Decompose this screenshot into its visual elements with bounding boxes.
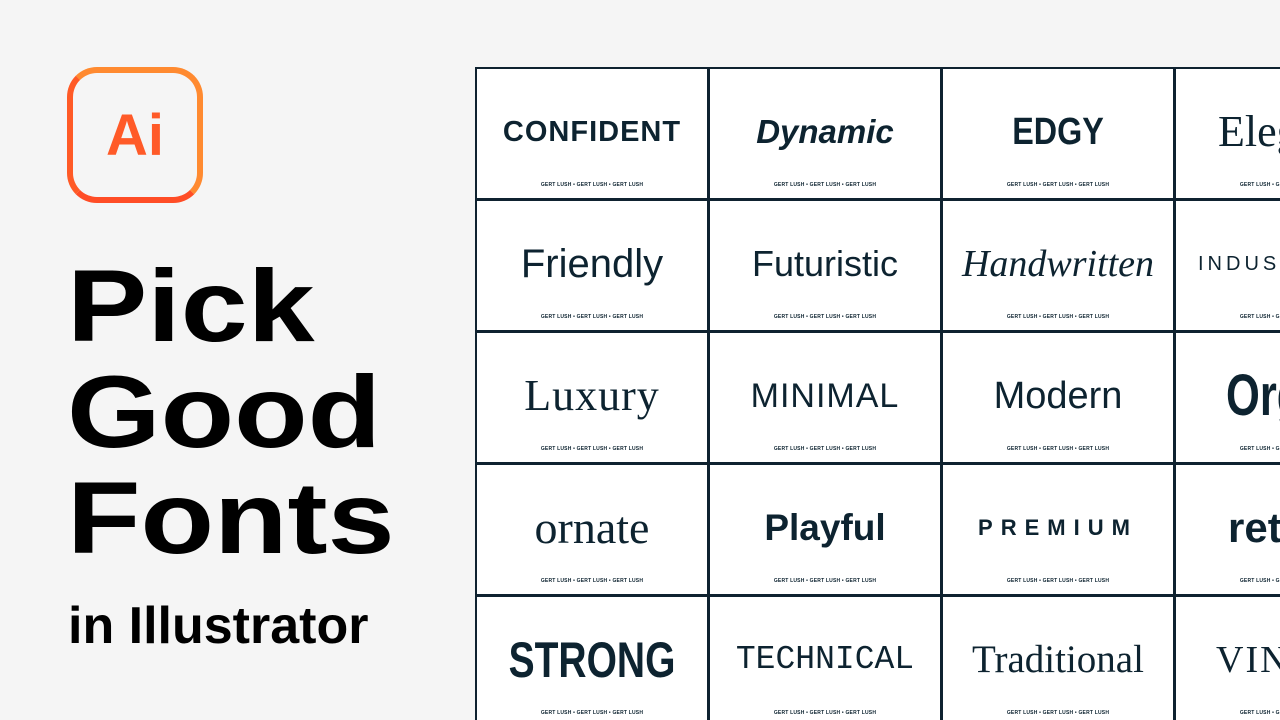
cell: vintage xyxy=(1176,597,1280,720)
cell: minimal: GERT LUSH • GERT LUSH • GERT LUSH xyxy=(774,446,876,452)
cell: confident: GERT LUSH • GERT LUSH • GERT LUSH xyxy=(541,182,643,188)
cell: dynamic: Dynamic xyxy=(756,113,894,150)
cell: luxury: GERT LUSH • GERT LUSH • GERT LUSH xyxy=(541,446,643,452)
cell: futuristic xyxy=(710,201,940,330)
cell: strong xyxy=(477,597,707,720)
cell: minimal: MINIMAL xyxy=(751,377,899,415)
font style grid xyxy=(475,67,1280,720)
cell: traditional: Traditional xyxy=(972,638,1144,681)
cell: luxury xyxy=(477,333,707,462)
icon: Adobe Illustrator logo xyxy=(67,67,203,203)
cell: strong: STRONG xyxy=(509,632,675,688)
title: Pick xyxy=(67,249,315,363)
cell: premium: PREMIUM xyxy=(978,515,1138,540)
cell: premium: GERT LUSH • GERT LUSH • GERT LUSH xyxy=(1007,578,1109,584)
cell: futuristic: Futuristic xyxy=(752,243,898,284)
cell: ornate: ornate xyxy=(535,502,649,553)
cell: ornate: GERT LUSH • GERT LUSH • GERT LUSH xyxy=(541,578,643,584)
cell: premium xyxy=(943,465,1173,594)
cell: traditional xyxy=(943,597,1173,720)
cell: modern: GERT LUSH • GERT LUSH • GERT LUSH xyxy=(1007,446,1109,452)
cell: industrial xyxy=(1176,201,1280,330)
cell: confident xyxy=(477,69,707,198)
cell: playful xyxy=(710,465,940,594)
cell: playful: GERT LUSH • GERT LUSH • GERT LUSH xyxy=(774,578,876,584)
cell: friendly: Friendly xyxy=(521,242,663,286)
cell: technical xyxy=(710,597,940,720)
title: Fonts xyxy=(67,461,395,575)
cell: minimal xyxy=(710,333,940,462)
cell: ornate xyxy=(477,465,707,594)
cell: dynamic xyxy=(710,69,940,198)
cell: strong: GERT LUSH • GERT LUSH • GERT LUSH xyxy=(541,710,643,716)
cell: edgy: EDGY xyxy=(1012,111,1104,153)
cell: modern: Modern xyxy=(994,375,1122,417)
cell: edgy xyxy=(943,69,1173,198)
title xyxy=(67,249,395,575)
cell: edgy: GERT LUSH • GERT LUSH • GERT LUSH xyxy=(1007,182,1109,188)
cell: futuristic: GERT LUSH • GERT LUSH • GERT LUSH xyxy=(774,314,876,320)
title: Good xyxy=(67,355,381,469)
cell: retro xyxy=(1176,465,1280,594)
cell: handwritten: Handwritten xyxy=(962,243,1154,285)
cell: handwritten: GERT LUSH • GERT LUSH • GERT LUSH xyxy=(1007,314,1109,320)
cell: friendly: GERT LUSH • GERT LUSH • GERT LUSH xyxy=(541,314,643,320)
cell: traditional: GERT LUSH • GERT LUSH • GERT LUSH xyxy=(1007,710,1109,716)
cell: technical: TECHNICAL xyxy=(736,641,914,678)
cell: handwritten xyxy=(943,201,1173,330)
cell: elegant xyxy=(1176,69,1280,198)
cell: friendly xyxy=(477,201,707,330)
cell: confident: CONFIDENT xyxy=(503,116,681,148)
cell: organic xyxy=(1176,333,1280,462)
cell: modern xyxy=(943,333,1173,462)
subtitle: in Illustrator xyxy=(68,597,368,655)
cell: playful: Playful xyxy=(764,507,886,548)
cell: luxury: Luxury xyxy=(524,371,660,420)
cell: dynamic: GERT LUSH • GERT LUSH • GERT LUSH xyxy=(774,182,876,188)
cell: technical: GERT LUSH • GERT LUSH • GERT LUSH xyxy=(774,710,876,716)
icon: Adobe Illustrator logo: Ai xyxy=(106,103,164,168)
